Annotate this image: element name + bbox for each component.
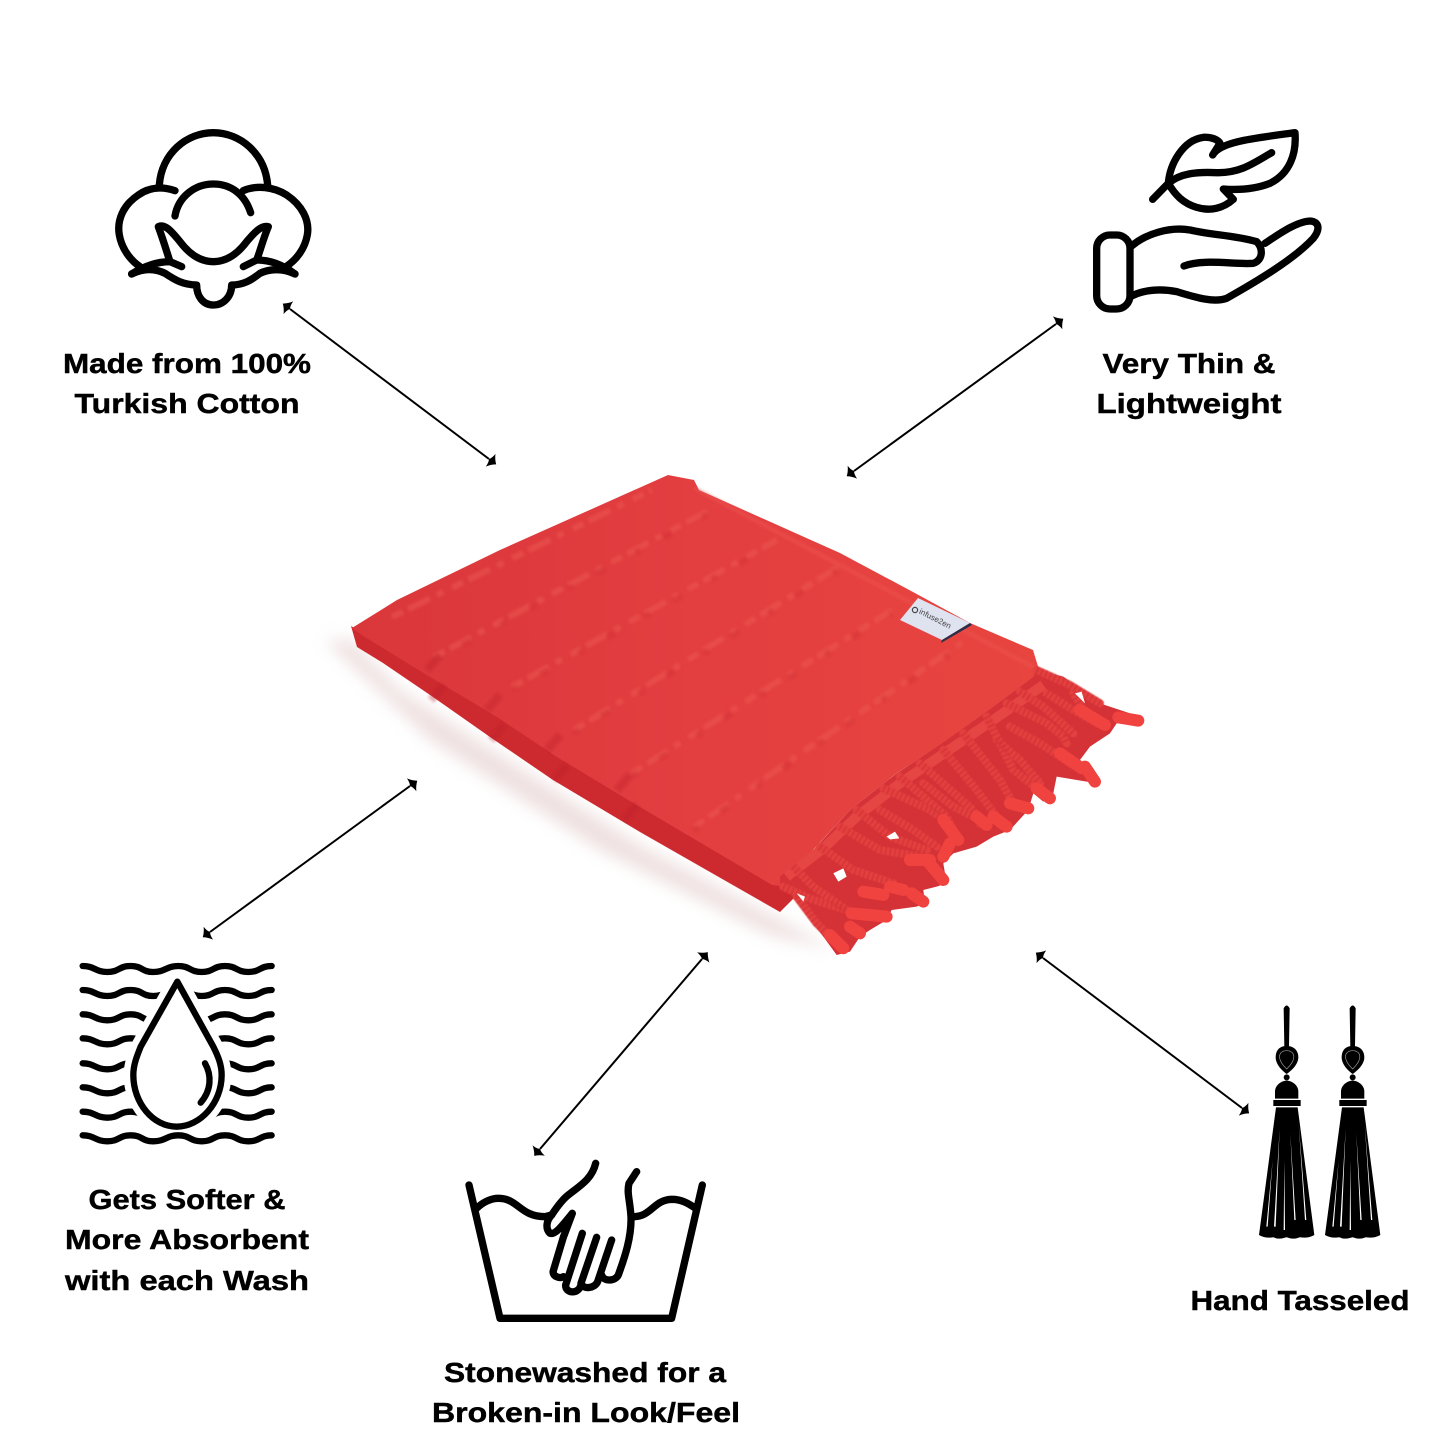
arrow: cotton to towel [278, 297, 501, 471]
heading: Very Thin & Lightweight: Very Thin & [1102, 348, 1276, 379]
arrow: absorbent to towel [198, 774, 422, 944]
arrow: lightweight to towel [842, 312, 1068, 483]
heading: Very Thin & Lightweight: Lightweight [1096, 388, 1282, 419]
towel woven stripes [392, 488, 1035, 830]
towel photo [325, 475, 1140, 955]
heading: Gets Softer & More Absorbent with each Wash: Gets Softer & [88, 1184, 286, 1215]
knot tufts [830, 710, 1138, 948]
towel brand label [900, 598, 972, 643]
arrow: stonewashed to towel [528, 947, 714, 1161]
heading: Stonewashed for a Broken-in Look/Feel: Stonewashed for a [444, 1357, 726, 1388]
right tassel [1325, 1005, 1380, 1239]
heading: Made from 100% Turkish Cotton [63, 348, 311, 419]
left tassel [1259, 1005, 1314, 1239]
heading: Very Thin & Lightweight [1096, 348, 1282, 419]
fringe gaps [797, 692, 1085, 902]
icon: water drop with waves [83, 966, 272, 1141]
heading: Gets Softer & More Absorbent with each Wash [64, 1184, 309, 1296]
icon: two tassels [1259, 1005, 1380, 1239]
heading: Made from 100% Turkish Cotton: Turkish Cotton [74, 388, 300, 419]
heading: Stonewashed for a Broken-in Look/Feel [432, 1357, 740, 1428]
heading: Gets Softer & More Absorbent with each Wash: with each Wash [64, 1265, 309, 1296]
fringe base strip [787, 685, 1043, 877]
heading: Hand Tasseled: Hand Tasseled [1190, 1285, 1410, 1316]
heading: Stonewashed for a Broken-in Look/Feel: Broken-in Look/Feel [432, 1397, 740, 1428]
towel underside fold [351, 626, 795, 912]
heading: Gets Softer & More Absorbent with each Wash: More Absorbent [65, 1224, 309, 1255]
towel top surface [352, 475, 1040, 887]
icon: hand washing basin [469, 1163, 702, 1318]
icon: feather over hand [1097, 133, 1318, 309]
twisted strands [783, 670, 1100, 943]
heading: Made from 100% Turkish Cotton: Made from 100% [63, 348, 311, 379]
icon: cotton boll [119, 133, 308, 305]
towel brand label: infuse2en [918, 607, 953, 631]
towel fringe and tassels [780, 670, 1140, 955]
arrow: tassel to towel [1031, 946, 1254, 1120]
